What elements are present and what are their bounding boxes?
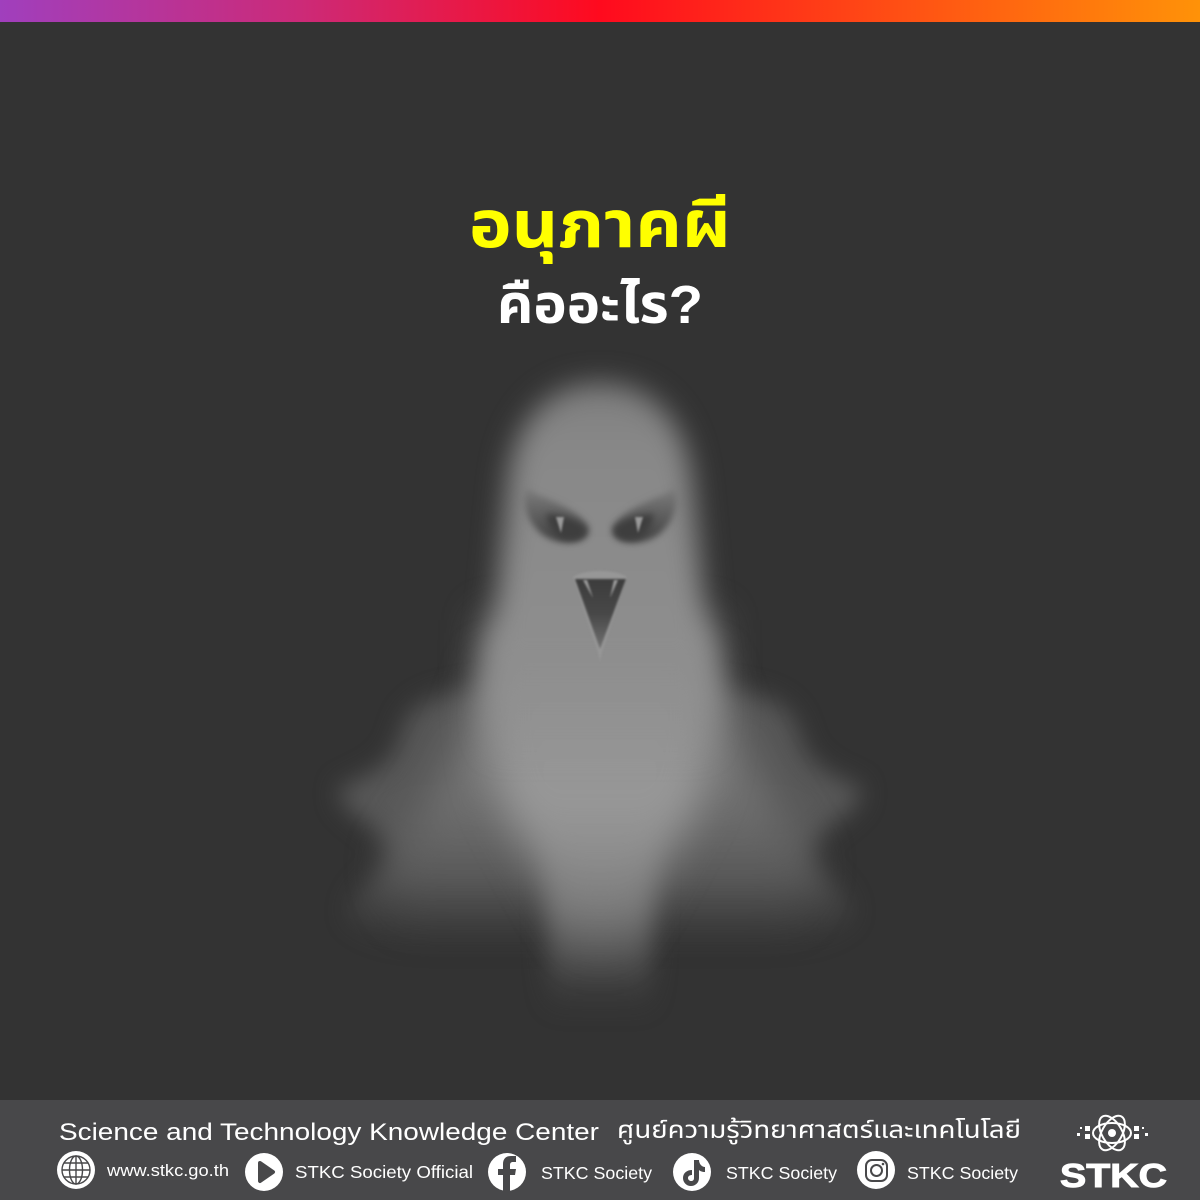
youtube label: STKC Society Official — [295, 1162, 473, 1182]
icon: globe — [57, 1151, 95, 1189]
title — [469, 187, 731, 335]
tiktok label: STKC Society — [726, 1163, 837, 1183]
top gradient bar — [0, 0, 1200, 22]
footer heading english: Science and Technology Knowledge Center — [59, 1119, 599, 1146]
ghost central column — [545, 820, 655, 1012]
icon: tiktok — [673, 1153, 711, 1191]
icon: right eye — [612, 487, 677, 542]
ghost skirt — [339, 670, 861, 950]
icon: beak — [573, 571, 627, 662]
logo: STKC wordmark: STKC — [1060, 1157, 1167, 1194]
icon: youtube play — [245, 1153, 283, 1191]
footer band — [0, 1100, 1200, 1200]
ghost face — [524, 487, 677, 662]
icon: left eye — [524, 487, 589, 542]
logo: atom mark — [1077, 1112, 1148, 1154]
ghost lower robe — [385, 660, 815, 935]
ghost head — [486, 383, 714, 760]
illustration: ghost — [339, 383, 861, 1012]
icon: facebook — [488, 1153, 526, 1191]
title: คืออะไร? — [497, 275, 703, 335]
footer heading thai: ศูนย์ความรู้วิทยาศาสตร์และเทคโนโลยี — [617, 1117, 1021, 1145]
ghost lower torso — [485, 620, 715, 965]
website label: www.stkc.go.th — [106, 1162, 229, 1180]
instagram label: STKC Society — [907, 1163, 1018, 1183]
icon: instagram — [857, 1151, 895, 1189]
facebook label: STKC Society — [541, 1163, 652, 1183]
title: อนุภาคผี — [469, 187, 731, 264]
